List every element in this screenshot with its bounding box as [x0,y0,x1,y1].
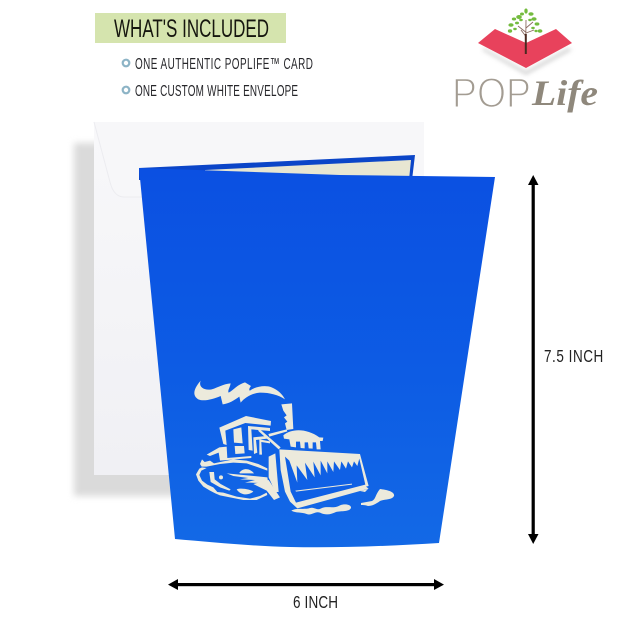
logo: POP wordmark: POP [452,69,531,116]
dirt splash [360,489,394,506]
cab roof [219,416,271,445]
label: 6 inch: 6 INCH [293,593,338,613]
blade [279,449,369,508]
logo: tree [508,8,542,54]
wheel spikes [227,473,268,483]
logo: red open book [478,29,572,68]
smoke [194,381,285,404]
envelope flap [94,122,424,197]
wheel top [239,469,254,473]
crossed bars [258,429,281,449]
cab window [233,427,243,443]
envelope [94,122,424,475]
pipe detail [253,436,267,454]
logo shadow [482,48,572,75]
arrow: width [168,579,444,590]
push arm [269,453,279,492]
logo: Life wordmark: Life [531,73,598,113]
fender [207,447,251,461]
track inner [209,472,231,491]
icon: bullet one [123,60,129,66]
bulldozer cutout [194,381,394,514]
logo: poplife [452,8,598,116]
arrow: height [528,175,538,544]
tracks [196,459,268,500]
card back panel [139,155,415,180]
card inside cream [205,160,411,180]
cab pillar [248,426,270,451]
label: 7.5 inch: 7.5 INCH [544,347,603,367]
heading: what's included: WHAT'S INCLUDED [114,15,269,43]
text: one custom white envelope: ONE CUSTOM WHITE ENVELOPE [135,82,298,100]
list: included items [123,55,313,100]
ground dirt under blade [291,504,351,514]
wheel hub [219,475,223,479]
track lower [196,467,267,500]
card front [139,168,495,547]
blade highlight line [295,484,352,492]
text: one authentic poplife card: ONE AUTHENTIC POPLIFE™ CARD [135,55,313,73]
chimney [281,403,293,430]
wheel bottom [237,489,253,494]
envelope shadow [74,143,314,496]
blade inner shadow [285,457,365,503]
icon: bullet two [123,87,129,93]
track upper [200,459,267,471]
engine hood [283,430,323,449]
cab lower panel [235,446,245,454]
